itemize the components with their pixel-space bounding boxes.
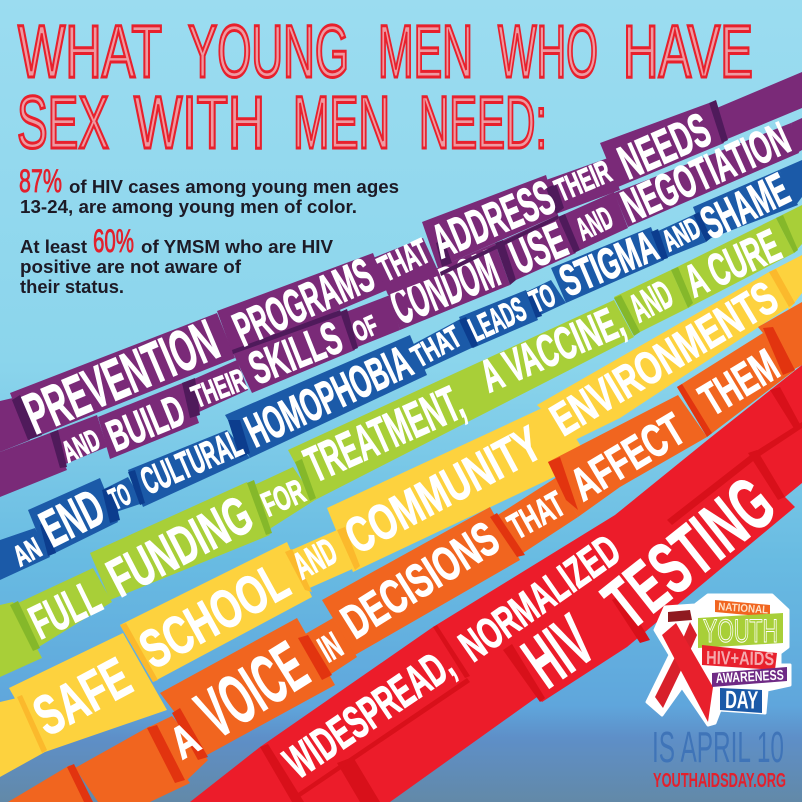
band: purple lower line, and build their skills of condom use and negotiation: THEIR	[187, 362, 251, 415]
logo word: hiv+aids: HIV+AIDS	[706, 648, 774, 670]
band: purple upper line, prevention programs that address their needs: THEIR	[550, 153, 616, 208]
text block: 87% statistic	[19, 163, 399, 217]
band: purple lower line, and build their skills of condom use and negotiation: AND	[57, 423, 105, 469]
band: red, widespread normalized HIV testing: WIDESPREAD,	[275, 638, 463, 788]
text block: 60% statistic	[20, 223, 333, 297]
band: yellow, safe school and community environments: SCHOOL	[130, 551, 299, 681]
text block: 60% statistic: of YMSM who are HIV	[141, 237, 333, 257]
band: purple lower line, and build their skills of condom use and negotiation	[0, 111, 802, 497]
band: yellow, safe school and community environments: COMMUNITY	[336, 415, 550, 565]
logo word: national: NATIONAL	[718, 601, 769, 616]
band: blue, an end to cultural homophobia that leads to stigma and shame: LEADS	[463, 290, 532, 349]
band: yellow, safe school and community environments	[0, 255, 802, 777]
title: WHO	[498, 10, 598, 93]
title: MEN	[378, 10, 473, 93]
band: green, full funding for treatment, a vaccine, and a cure: FUNDING	[98, 485, 262, 609]
band: blue, an end to cultural homophobia that leads to stigma and shame: TO	[524, 277, 561, 319]
band: purple upper line, prevention programs that address their needs: PROGRAMS	[226, 249, 382, 357]
band: purple upper line, prevention programs that address their needs: ADDRESS	[425, 171, 562, 269]
title: MEN	[293, 81, 390, 164]
title: SEX	[17, 81, 109, 164]
band: red, widespread normalized HIV testing	[190, 365, 802, 802]
band: yellow, safe school and community environments: AND	[287, 531, 344, 588]
band: red, widespread normalized HIV testing: NORMALIZED	[451, 526, 629, 671]
title: YOUNG	[188, 10, 349, 93]
text block: 60% statistic: positive are not aware of	[20, 257, 242, 277]
band: purple upper line, prevention programs that address their needs	[0, 72, 802, 452]
logo word: day	[720, 686, 762, 715]
band: purple lower line, and build their skills of condom use and negotiation: CONDOM	[382, 239, 507, 336]
band: red, widespread normalized HIV testing: HIV	[509, 599, 608, 703]
band: green, full funding for treatment, a vaccine, and a cure: FOR	[256, 472, 311, 524]
logo white sticker backing	[647, 595, 790, 725]
band: purple upper line, prevention programs that address their needs: NEEDS	[611, 104, 718, 190]
text block: 60% statistic: At least	[20, 237, 87, 257]
band: purple upper line, prevention programs that address their needs: THAT	[372, 230, 435, 289]
band: orange, a voice in decisions that affect them: THAT	[501, 483, 572, 547]
title: WHAT	[18, 10, 162, 93]
band: blue, an end to cultural homophobia that leads to stigma and shame: TO	[104, 478, 136, 516]
band: blue, an end to cultural homophobia that leads to stigma and shame: AN	[8, 532, 47, 573]
band: purple lower line, and build their skills of condom use and negotiation: BUILD	[100, 386, 192, 461]
text block: 87% statistic: 13-24, are among young men of color.	[20, 197, 357, 217]
band: blue, an end to cultural homophobia that leads to stigma and shame: END	[31, 479, 114, 559]
text block: 87% statistic: of HIV cases among young men ages	[69, 177, 399, 197]
band: green, full funding for treatment, a vaccine, and a cure: FULL	[22, 571, 110, 650]
band: blue, an end to cultural homophobia that leads to stigma and shame: AND	[657, 212, 706, 258]
logo word: hiv+aids	[702, 645, 777, 670]
logo word: day: DAY	[725, 686, 759, 715]
band: blue, an end to cultural homophobia that leads to stigma and shame: STIGMA	[553, 222, 665, 306]
band: purple lower line, and build their skills of condom use and negotiation: SKILLS	[241, 311, 349, 394]
band: green, full funding for treatment, a vaccine, and a cure: TREATMENT,	[297, 374, 472, 493]
band: blue, an end to cultural homophobia that leads to stigma and shame: CULTURAL	[135, 423, 249, 503]
band: orange, a voice in decisions that affect them: VOICE	[184, 627, 321, 753]
band: purple lower line, and build their skills of condom use and negotiation: OF	[348, 309, 382, 347]
band: orange, a voice in decisions that affect them: A	[162, 712, 208, 769]
band: purple lower line, and build their skills of condom use and negotiation: USE	[501, 212, 575, 285]
icon: red ribbon	[655, 610, 713, 722]
band: yellow, safe school and community environments: SAFE	[23, 645, 141, 748]
band: green, full funding for treatment, a vaccine, and a cure: A VACCINE,	[472, 295, 632, 402]
band: green, full funding for treatment, a vaccine, and a cure: AND	[623, 272, 680, 331]
title: WITH	[134, 81, 265, 164]
band: orange, a voice in decisions that affect them: DECISIONS	[333, 512, 508, 649]
band: orange, a voice in decisions that affect them	[8, 302, 802, 802]
band: blue, an end to cultural homophobia that leads to stigma and shame: HOMOPHOBIA	[237, 335, 420, 457]
band: blue, an end to cultural homophobia that leads to stigma and shame	[0, 160, 802, 580]
title: NEED:	[419, 81, 547, 164]
title	[17, 10, 753, 164]
band: purple upper line, prevention programs that address their needs: PREVENTION	[15, 307, 228, 447]
text block: 60% statistic: their status.	[20, 277, 124, 297]
band: orange, a voice in decisions that affect them: IN	[312, 624, 349, 670]
band: blue, an end to cultural homophobia that leads to stigma and shame: THAT	[405, 319, 467, 374]
text block: 87% statistic: 87%	[19, 163, 62, 199]
text block: 60% statistic: 60%	[93, 223, 134, 259]
band: purple lower line, and build their skills of condom use and negotiation: AND	[570, 199, 618, 247]
band: orange, a voice in decisions that affect them: AFFECT	[561, 403, 694, 511]
band: green, full funding for treatment, a vaccine, and a cure	[0, 205, 802, 677]
logo: National Youth HIV+AIDS Awareness Day	[647, 595, 790, 725]
